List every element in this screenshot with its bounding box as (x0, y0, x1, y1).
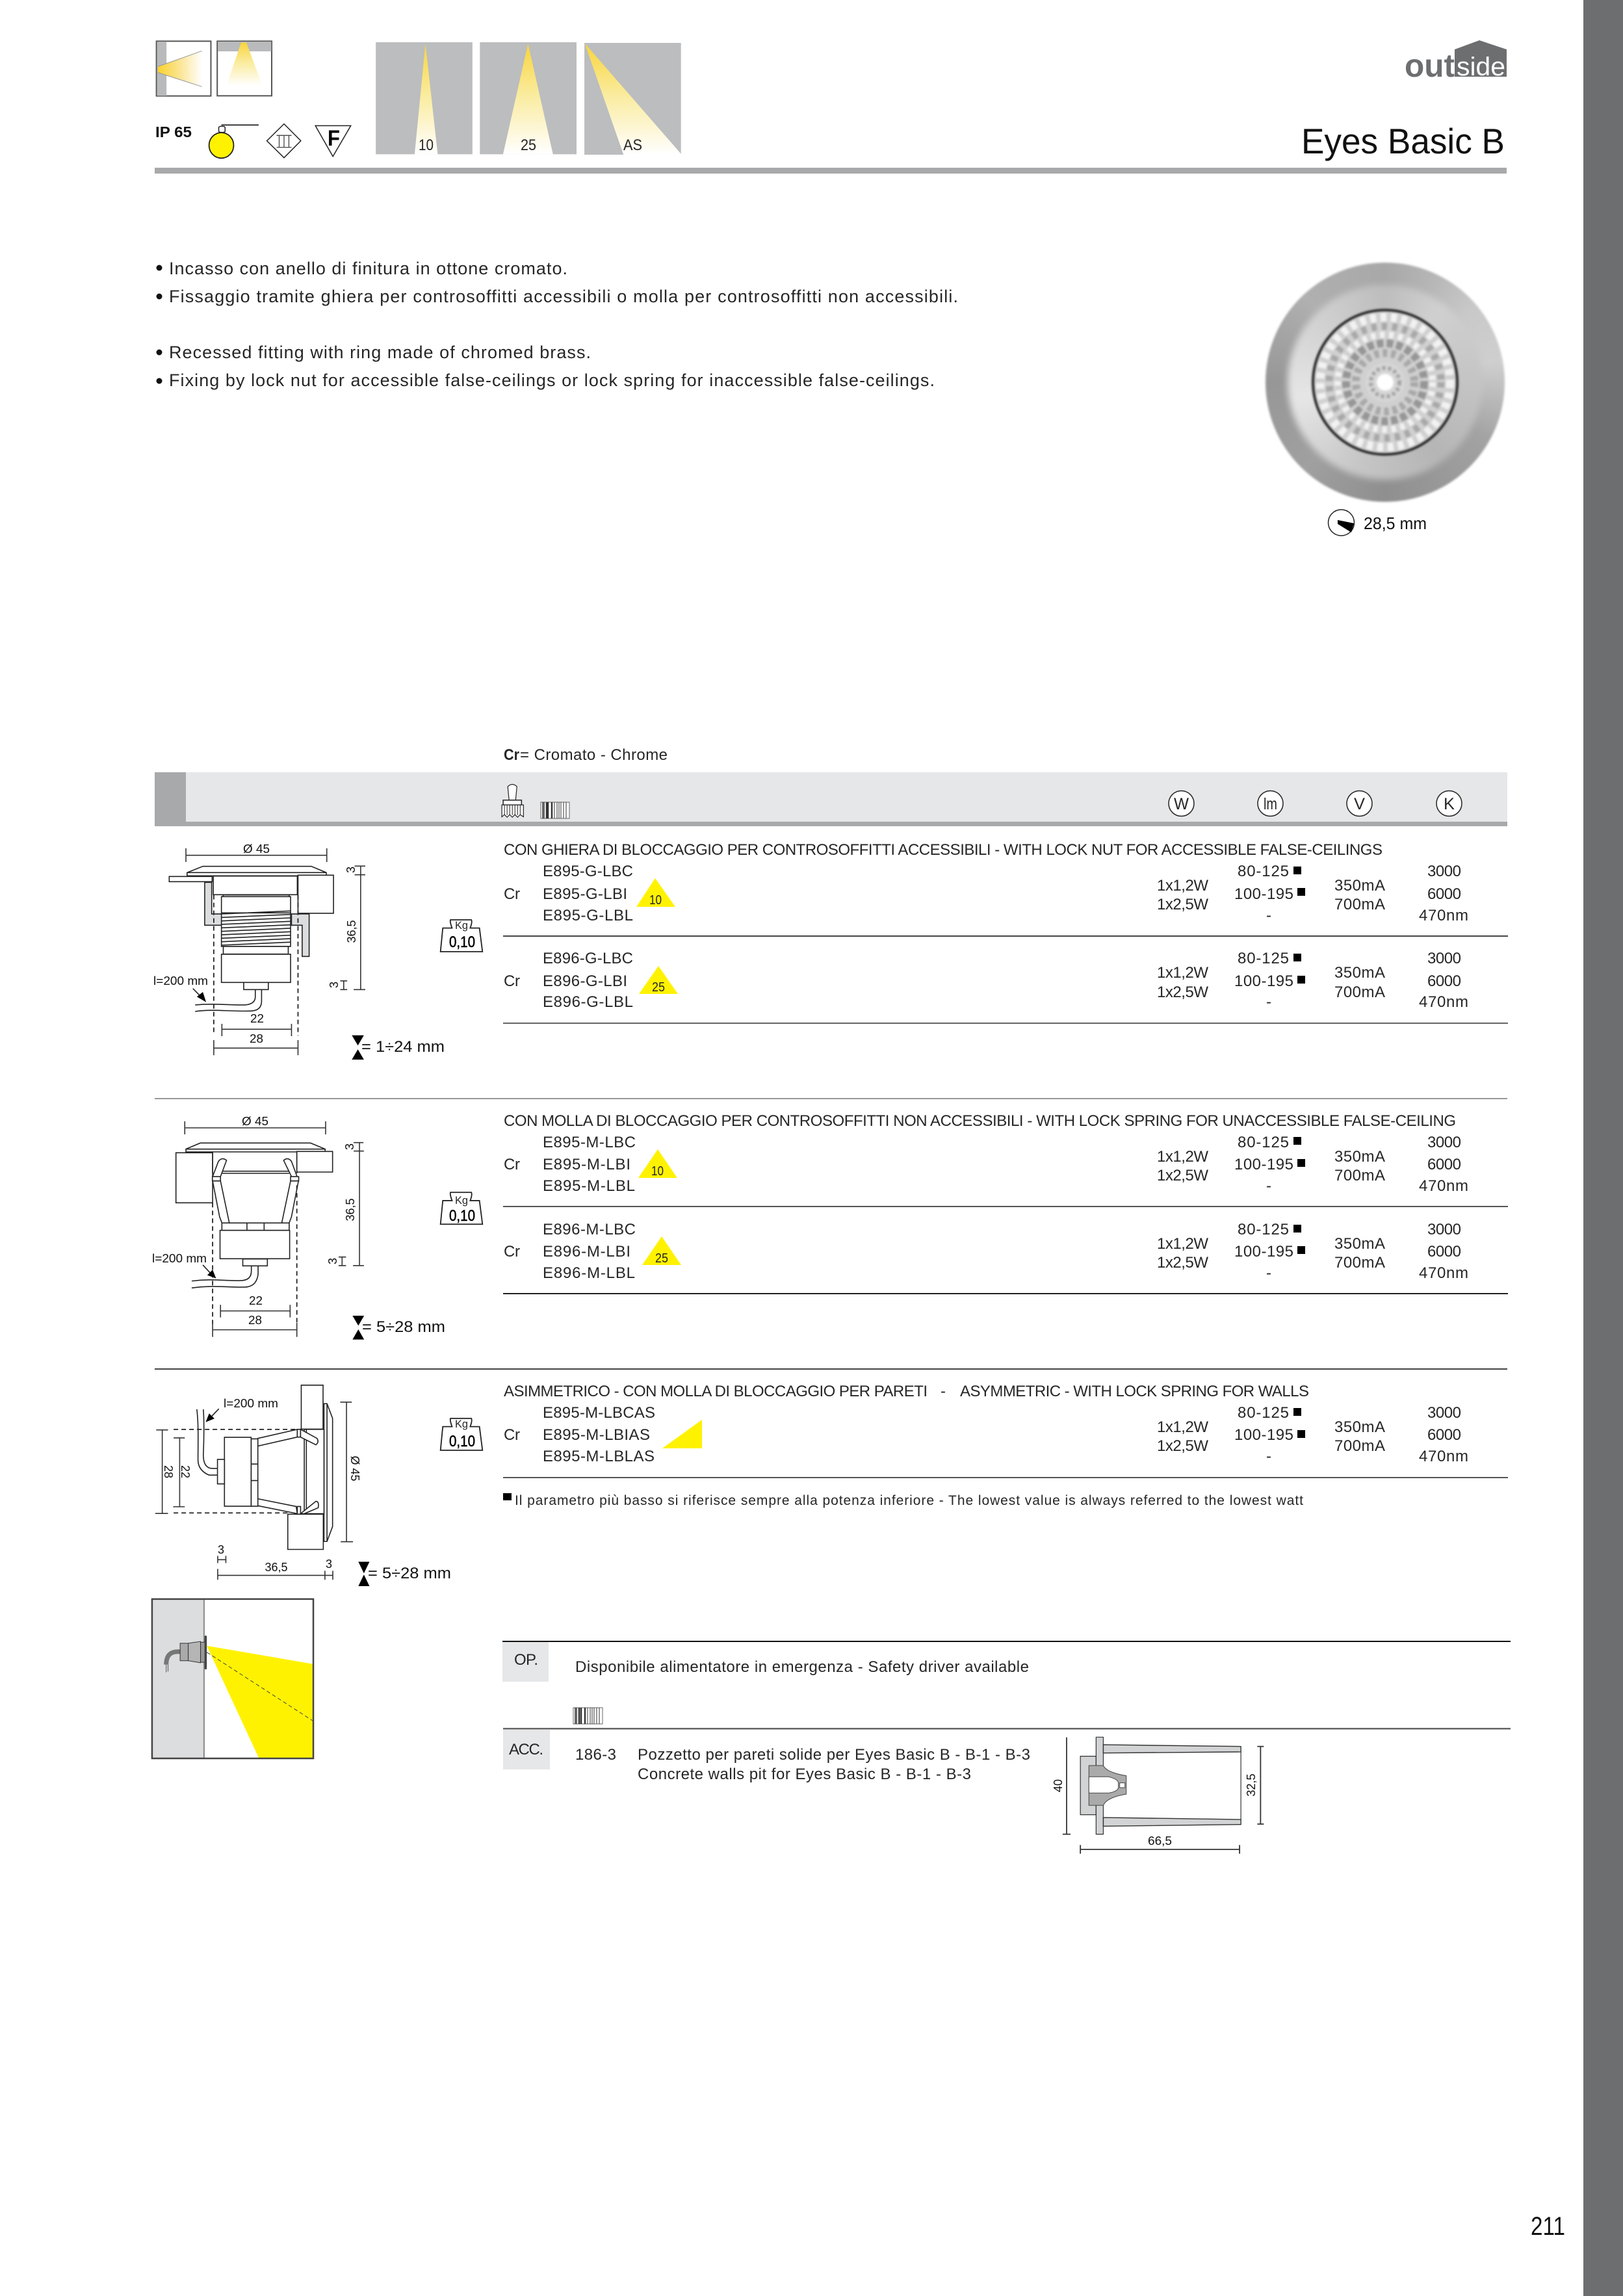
description text: Incasso con anello di finitura in ottone cromato. (169, 259, 567, 278)
weight badge 1: Kg (455, 919, 468, 932)
drawing: lock spring version: l=200 mm (152, 1252, 207, 1265)
weight badge 3: Kg (455, 1418, 468, 1430)
drawing: asymmetric wall version: 3 (326, 1558, 332, 1571)
rows E895-M-AS: 350mA (1334, 1418, 1385, 1436)
weight badge 3 (441, 1418, 482, 1450)
section heading: ASYMMETRIC - WITH LOCK SPRING FOR WALLS (960, 1383, 1309, 1400)
rows E895-G: 700mA (1334, 896, 1385, 913)
rows E895-M-AS: 6000 (1427, 1426, 1461, 1444)
drawing: lock spring version: 3 (326, 1258, 339, 1264)
rows E895-M-AS: E895-M-LBCAS (543, 1404, 655, 1422)
description text: Recessed fitting with ring made of chromed brass. (169, 343, 591, 362)
weight badge 2: Kg (455, 1194, 468, 1207)
rows E896-M: E896-M-LBC (543, 1221, 636, 1238)
icon: asymmetric beam (584, 43, 681, 155)
drawing: lock spring version: 36,5 (344, 1198, 357, 1221)
rows E895-M-AS: 3000 (1427, 1404, 1461, 1422)
icons: mounting and beams (157, 41, 681, 158)
drawing: lock spring version: 3 (343, 1143, 356, 1150)
rows E895-G: 3000 (1427, 863, 1461, 880)
rows E896-G: 1x2,5W (1157, 984, 1208, 1001)
drawing: lock spring version: = 5÷28 mm (362, 1318, 445, 1336)
F mark letter: F (328, 126, 340, 151)
rows E896-G (504, 950, 1468, 1011)
rows E895-G: 470nm (1419, 907, 1468, 924)
description text (156, 259, 958, 390)
rows E895-M: E895-M-LBL (543, 1177, 635, 1195)
rows E896-M: 350mA (1334, 1235, 1385, 1253)
section: lock spring (503, 1112, 1508, 1294)
product photo (1266, 263, 1505, 502)
drawing: lock nut version (153, 842, 445, 1060)
rows E895-G: 350mA (1334, 877, 1385, 894)
column icon: volt (1347, 790, 1372, 816)
rows E895-M-AS: 1x2,5W (1157, 1437, 1208, 1455)
rows E895-M: 350mA (1334, 1148, 1385, 1166)
rows E896-G: E896-G-LBL (543, 993, 633, 1011)
rows E896-G: E896-G-LBC (543, 950, 633, 967)
drawing: asymmetric wall version: l=200 mm (224, 1397, 278, 1410)
rows E896-G: Cr (504, 972, 520, 990)
rows E896-M: - (1266, 1264, 1271, 1282)
rows E895-M: E895-M-LBI (543, 1156, 630, 1173)
rows E896-G: 3000 (1427, 950, 1461, 967)
rows E896-M: 25 (655, 1251, 668, 1266)
title: Eyes Basic B (1301, 121, 1505, 161)
rows E896-G: 1x1,2W (1157, 964, 1208, 982)
hole size: 28,5 mm (1364, 514, 1427, 533)
rows E895-G: 6000 (1427, 885, 1461, 903)
icon: class III (267, 124, 301, 158)
installation diagram: wall with asymmetric beam (152, 1599, 313, 1758)
beam label AS: AS (623, 137, 642, 154)
section: asymmetric (503, 1383, 1508, 1478)
rows E896-M: Cr (504, 1243, 520, 1260)
beam label 10: 10 (419, 137, 434, 154)
rows E896-G: 470nm (1419, 993, 1468, 1011)
hole size (1329, 510, 1427, 536)
options row: Disponibile alimentatore in emergenza - Safety driver available (575, 1658, 1029, 1676)
rows E895-G: 10 (649, 893, 662, 907)
section: lock nut (503, 841, 1508, 1024)
rows E895-M-AS: 1x1,2W (1157, 1418, 1208, 1436)
divider (155, 1098, 1507, 1099)
rows E895-M: 700mA (1334, 1167, 1385, 1184)
rows E896-G: 80-125 (1238, 950, 1289, 967)
rows E896-G: E896-G-LBI (543, 972, 627, 990)
rows E895-M-AS (504, 1404, 1468, 1465)
rows E895-M-AS: Cr (504, 1426, 520, 1444)
description text: Fissaggio tramite ghiera per controsoffitti accessibili o molla per controsoffitti non accessibili. (169, 287, 958, 306)
drawing: lock nut version: 36,5 (345, 920, 358, 943)
drawing: asymmetric wall version: 36,5 (265, 1561, 288, 1574)
rows E896-G: 6000 (1427, 972, 1461, 990)
drawing: asymmetric wall version: = 5÷28 mm (368, 1565, 451, 1582)
rows E896-M (504, 1221, 1468, 1282)
rows E895-M-AS: - (1266, 1448, 1271, 1465)
section heading: - (941, 1383, 946, 1400)
rows E895-G: 1x2,5W (1157, 896, 1208, 913)
drawing: lock nut version: l=200 mm (153, 974, 208, 987)
rows E895-M-AS: 700mA (1334, 1437, 1385, 1455)
section heading: ASIMMETRICO - CON MOLLA DI BLOCCAGGIO PER PARETI (504, 1383, 928, 1400)
drawing: lock nut version: Ø 45 (243, 842, 270, 855)
rows E895-G: E895-G-LBI (543, 885, 627, 903)
rows E896-M: 470nm (1419, 1264, 1468, 1282)
rows E895-M-AS: 100-195 (1234, 1426, 1293, 1444)
drawing: lock spring version: 28 (248, 1314, 262, 1327)
rows E895-M: 1x1,2W (1157, 1148, 1208, 1166)
icon: barcode (573, 1708, 603, 1724)
logo: outside (1405, 40, 1507, 84)
rows E896-M: E896-M-LBL (543, 1264, 635, 1282)
logo: outside: side (1457, 53, 1505, 81)
drawing: lock spring version: 22 (249, 1294, 263, 1307)
rows E896-G: - (1266, 993, 1271, 1011)
drawing: wall pit accessory: 40 (1052, 1779, 1065, 1792)
accessories row: Concrete walls pit for Eyes Basic B - B-1 - B-3 (638, 1766, 971, 1783)
drawing: lock nut version: = 1÷24 mm (361, 1038, 445, 1056)
icon: F mark triangle (315, 125, 351, 157)
table header (155, 772, 1507, 826)
rows E895-G: 100-195 (1234, 885, 1293, 903)
options row (502, 1641, 1511, 1682)
drawing: wall pit accessory (1052, 1737, 1264, 1854)
divider (155, 1368, 1507, 1370)
footnote: Il parametro più basso si riferisce sempre alla potenza inferiore - The lowest value is always referred to the lowest watt (515, 1493, 1303, 1508)
icon: lamp (209, 125, 259, 158)
column icon: volt: V (1354, 795, 1365, 813)
rows E896-M: 100-195 (1234, 1243, 1293, 1260)
rows E895-M: Cr (504, 1156, 520, 1173)
icon: wall mounted beam (157, 41, 211, 96)
icon: finish brush (502, 785, 523, 817)
IP rating: IP 65 (155, 124, 192, 140)
rows E896-M: 80-125 (1238, 1221, 1289, 1238)
accessories row: Pozzetto per pareti solide per Eyes Basic B - B-1 - B-3 (638, 1746, 1030, 1764)
options row: OP. (514, 1651, 538, 1669)
side bar (1583, 0, 1623, 2296)
rows E896-M: 1x1,2W (1157, 1235, 1208, 1253)
rows E896-G: 700mA (1334, 984, 1385, 1001)
rows E896-G: 25 (652, 980, 665, 995)
rows E895-M: 6000 (1427, 1156, 1461, 1173)
rows E895-G: 1x1,2W (1157, 877, 1208, 894)
rows E896-M: 3000 (1427, 1221, 1461, 1238)
rows E895-G: Cr (504, 885, 520, 903)
icon: 25 degree beam (480, 42, 577, 154)
column icon: kelvin (1436, 790, 1462, 816)
rows E895-G: E895-G-LBC (543, 863, 633, 880)
drawing: lock nut version: 28 (250, 1032, 263, 1045)
icon: barcode (541, 802, 569, 818)
icon: ceiling mounted beam (217, 41, 272, 96)
rows E895-M: - (1266, 1177, 1271, 1195)
section heading (504, 1383, 1309, 1400)
column icon: watt (1169, 790, 1194, 816)
rows E895-G (504, 863, 1468, 924)
weight badge 1 (441, 919, 482, 952)
rows E895-G: 80-125 (1238, 863, 1289, 880)
rows E896-M: 1x2,5W (1157, 1254, 1208, 1272)
rows E896-M: E896-M-LBI (543, 1243, 630, 1260)
weight badge 3: 0,10 (449, 1433, 475, 1450)
column icon: lumen (1258, 790, 1283, 816)
rows E896-G: 100-195 (1234, 972, 1293, 990)
rows E895-M-AS: E895-M-LBLAS (543, 1448, 655, 1465)
rows E895-M: E895-M-LBC (543, 1134, 636, 1151)
rows E895-M: 3000 (1427, 1134, 1461, 1151)
drawing: asymmetric wall version: 28 (162, 1465, 175, 1478)
column icon: watt: W (1174, 795, 1189, 813)
rows E895-M: 100-195 (1234, 1156, 1293, 1173)
icon: 10 degree beam (376, 42, 473, 154)
drawing: asymmetric wall version: 3 (218, 1543, 224, 1556)
rows E895-M-AS: 470nm (1419, 1448, 1468, 1465)
weight badge 1: 0,10 (449, 933, 475, 951)
top rule (155, 168, 1507, 174)
section heading: CON MOLLA DI BLOCCAGGIO PER CONTROSOFFITTI NON ACCESSIBILI - WITH LOCK SPRING FOR UNACCESSIBLE FALSE-CEILING (504, 1112, 1456, 1130)
drawing: wall pit accessory: 32,5 (1245, 1773, 1258, 1797)
drawing: lock nut version: 3 (328, 982, 341, 988)
finish legend: Cr (504, 746, 519, 764)
weight badge 2: 0,10 (449, 1207, 475, 1225)
accessories row: ACC. (509, 1741, 543, 1758)
rows E895-M: 10 (651, 1164, 664, 1179)
rows E895-M-AS: 80-125 (1238, 1404, 1289, 1422)
finish legend: = Cromato - Chrome (520, 746, 668, 764)
drawing: lock spring version: Ø 45 (242, 1115, 268, 1128)
rows E895-G: E895-G-LBL (543, 907, 633, 924)
drawing: asymmetric wall version: 22 (179, 1465, 192, 1478)
section heading: CON GHIERA DI BLOCCAGGIO PER CONTROSOFFITTI ACCESSIBILI - WITH LOCK NUT FOR ACCESSIBLE FALSE-CEILINGS (504, 841, 1383, 859)
rows E895-M (504, 1134, 1468, 1195)
rows E895-M-AS: E895-M-LBIAS (543, 1426, 650, 1444)
drawing: asymmetric wall version (155, 1385, 451, 1586)
column icon: lumen: lm (1264, 795, 1277, 813)
description text: Fixing by lock nut for accessible false-ceilings or lock spring for inaccessible false-ceilings. (169, 371, 935, 390)
rows E895-M: 1x2,5W (1157, 1167, 1208, 1184)
rows E895-G: - (1266, 907, 1271, 924)
rows E896-G: 350mA (1334, 964, 1385, 982)
accessories row (503, 1728, 1511, 1783)
rows E896-M: 6000 (1427, 1243, 1461, 1260)
logo: outside: out (1405, 47, 1455, 84)
beam label 25: 25 (521, 137, 536, 154)
rows E895-M: 80-125 (1238, 1134, 1289, 1151)
column icon: kelvin: K (1444, 795, 1455, 813)
page number: 211 (1531, 2212, 1565, 2241)
weight badge 2 (441, 1192, 482, 1225)
accessories row: 186-3 (575, 1746, 616, 1764)
drawing: asymmetric wall version: Ø 45 (348, 1455, 361, 1481)
drawing: lock nut version: 22 (250, 1012, 264, 1025)
drawing: lock nut version: 3 (344, 867, 357, 873)
drawing: lock spring version (152, 1115, 445, 1340)
rows E896-M: 700mA (1334, 1254, 1385, 1272)
rows E895-M: 470nm (1419, 1177, 1468, 1195)
drawing: wall pit accessory: 66,5 (1148, 1834, 1172, 1847)
